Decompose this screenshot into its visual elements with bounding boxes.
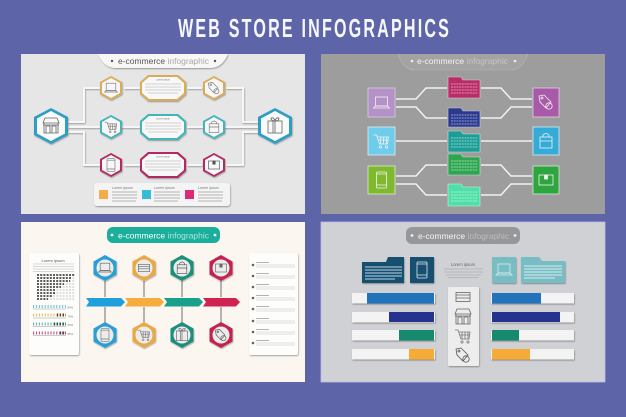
center text: Lorem ipsum [451, 262, 476, 267]
hexagon: cart [132, 322, 156, 348]
icon tile: laptop [492, 257, 516, 283]
header tab: e-commerce infographic [118, 56, 210, 66]
panel: folder flow [321, 54, 605, 214]
card heading: Lorem ipsum [41, 258, 65, 263]
left data card: 55% [68, 332, 74, 336]
right list card [249, 253, 298, 355]
legend [94, 183, 230, 206]
arrow: crimson [203, 298, 240, 306]
left data card: 80% [68, 306, 74, 310]
folder: green [448, 154, 480, 175]
icon tile: cart [368, 127, 395, 155]
icon tile: phone [410, 257, 434, 283]
folder: navy [448, 108, 480, 127]
left data card: 60% [68, 323, 74, 327]
octagon: crimson text box [140, 152, 186, 178]
hexagon: gift [258, 108, 292, 144]
hexagon: store [34, 108, 68, 144]
hexagon: bag [170, 255, 194, 281]
header tab: e-commerce infographic [417, 56, 509, 66]
octagon: teal text box [140, 114, 186, 140]
panel: bar comparison [321, 222, 605, 382]
arrow: orange [125, 298, 164, 306]
arrow: teal [164, 298, 203, 306]
legend: Lorem ipsum [154, 186, 175, 190]
icon tile: box [533, 166, 559, 194]
panel: hexagon flow [21, 54, 305, 214]
hexagon: laptop [94, 255, 116, 281]
left data card: 75% [68, 314, 74, 318]
folder: light teal [521, 257, 565, 283]
header pill: e-commerce infographic [418, 231, 510, 241]
panel: timeline [21, 222, 305, 382]
hexagon: card [132, 255, 156, 281]
left data card [29, 253, 79, 355]
icon tile: phone [368, 166, 395, 194]
hexagon: tags [210, 322, 232, 348]
hexagon: gift [170, 322, 194, 348]
icon tile: bag [533, 127, 559, 155]
center text [444, 262, 483, 278]
legend: Lorem ipsum [112, 186, 133, 190]
header pill [107, 227, 220, 243]
folder: dark blue [362, 257, 404, 283]
people rows [33, 306, 66, 333]
title: WEB STORE INFOGRAPHICS [178, 13, 449, 43]
connectors [396, 88, 532, 195]
hexagon: box [210, 255, 232, 281]
hexagon: tags [203, 76, 225, 100]
octagon: teal text box: Lorem ipsum [156, 118, 170, 120]
header pill: e-commerce infographic [118, 230, 210, 240]
center icon card [448, 287, 479, 366]
octagon: gold text box [140, 75, 186, 101]
legend: Lorem ipsum [198, 186, 219, 190]
hexagon: phone [100, 153, 122, 177]
arrow: blue [86, 298, 125, 306]
right bars [491, 293, 574, 360]
hexagon: laptop [100, 76, 122, 100]
header tab [98, 54, 228, 68]
octagon: crimson text box: Lorem ipsum [156, 156, 170, 158]
header pill [406, 227, 520, 244]
icon tile: tags [533, 88, 559, 117]
folder: teal [448, 131, 480, 152]
hexagon: cart [100, 115, 122, 139]
hexagon: box [203, 153, 225, 177]
header tab [398, 54, 528, 70]
hexagon: bag [203, 115, 225, 139]
dot matrix chart [37, 275, 75, 299]
stems [105, 281, 221, 323]
octagon: gold text box: Lorem ipsum [156, 78, 170, 82]
icon tile: laptop [368, 88, 395, 117]
connectors [68, 88, 258, 165]
folder: mint [448, 184, 480, 206]
folder: magenta [448, 77, 480, 98]
hexagon: phone [94, 322, 116, 348]
left bars [352, 293, 435, 360]
